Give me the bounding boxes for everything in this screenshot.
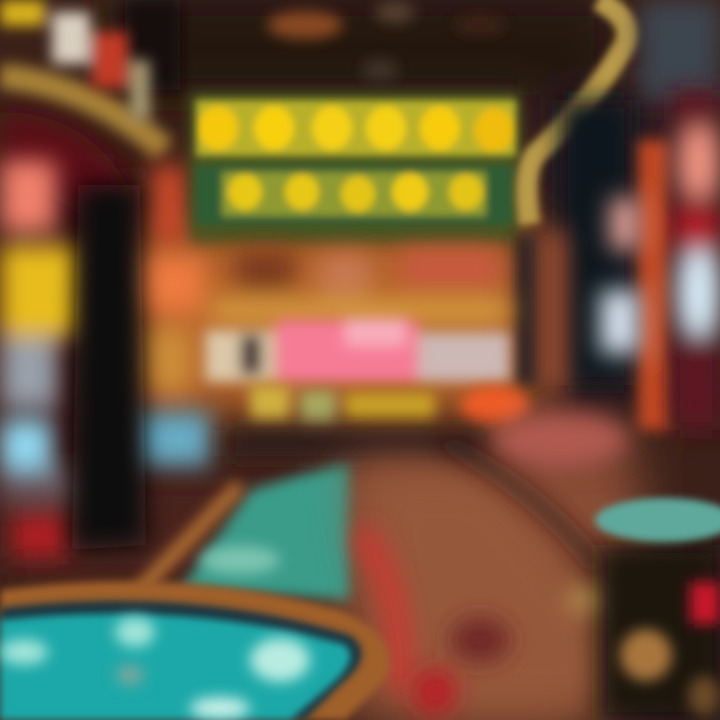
marquee lower row [196, 166, 512, 224]
ceiling details [125, 0, 506, 90]
foreground pool table [0, 581, 390, 720]
gold curved trim [527, 0, 627, 225]
centre bar and bright display [205, 250, 529, 426]
left wall signs [0, 160, 210, 557]
right table [595, 498, 720, 720]
right side columns and screens [515, 0, 720, 430]
marquee upper row [196, 100, 516, 156]
marquee sign [190, 92, 520, 242]
floor [140, 410, 630, 720]
top-left arch and signs [0, 0, 165, 240]
dark left pillar [72, 185, 146, 550]
